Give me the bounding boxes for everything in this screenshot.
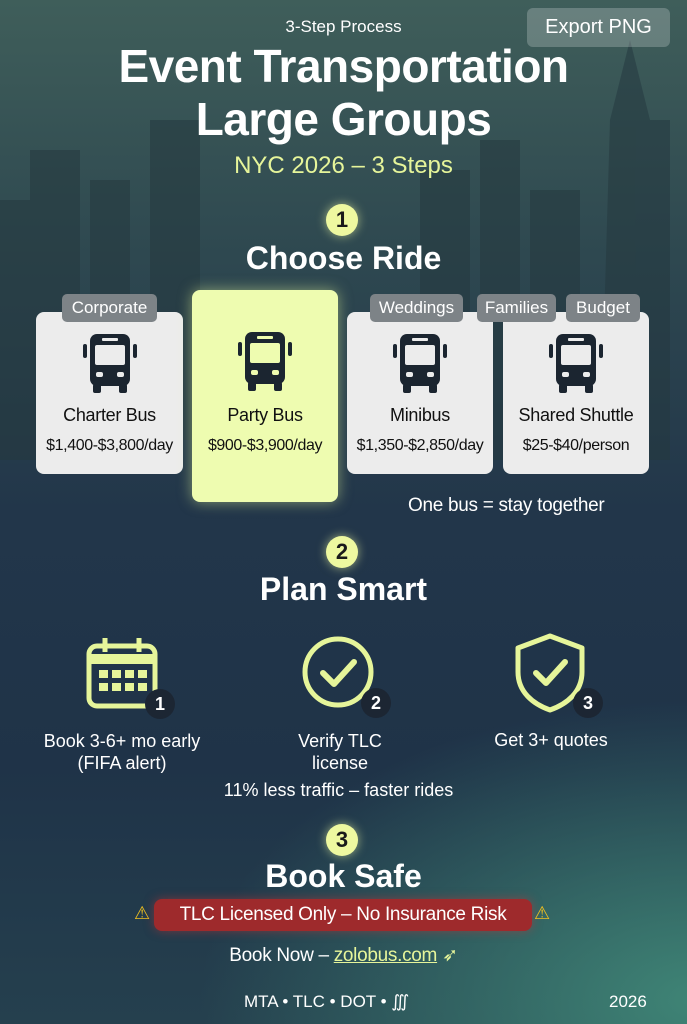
stat: 11% less traffic – faster rides <box>224 780 453 800</box>
title: Event Transportation <box>118 40 569 92</box>
text: book early <box>44 731 200 773</box>
step 3 badge: 3 <box>336 827 348 852</box>
tag: families <box>477 294 556 322</box>
export button <box>527 8 670 47</box>
step 3 badge <box>326 824 358 856</box>
subtitle: 3-Step Process <box>285 17 402 36</box>
heading: plan smart: Plan Smart <box>260 571 427 607</box>
tag: weddings <box>370 294 463 322</box>
warning pill: ⚠ <box>134 903 150 923</box>
card: shared shuttle <box>503 312 649 474</box>
text: verify tlc: license <box>312 753 368 773</box>
text: verify tlc <box>298 731 382 773</box>
title <box>118 40 569 145</box>
step 2 badge: 2 <box>336 539 348 564</box>
tag: corporate: Corporate <box>72 298 147 317</box>
icon: check circle: 2 <box>371 693 381 713</box>
icon: check circle <box>302 636 391 718</box>
note: One bus = stay together <box>408 495 604 516</box>
skyline background <box>0 41 670 380</box>
text: book early: (FIFA alert) <box>77 753 166 773</box>
card: minibus: $1,350-$2,850/day <box>357 437 483 454</box>
card: shared shuttle: Shared Shuttle <box>519 405 633 425</box>
card: shared shuttle: $25-$40/person <box>523 437 629 454</box>
card: party bus: $900-$3,900/day <box>208 437 322 454</box>
tag: budget <box>566 294 640 322</box>
tagline: NYC 2026 – 3 Steps <box>234 152 453 179</box>
card: party bus <box>192 290 338 502</box>
card: charter bus: $1,400-$3,800/day <box>46 437 173 454</box>
call to action: Book Now – zolobus.com ➶ <box>229 945 458 966</box>
text: quotes: Get 3+ quotes <box>494 730 608 750</box>
step 1 badge: 1 <box>336 207 348 232</box>
heading: book safe: Book Safe <box>265 858 422 894</box>
card: minibus: Minibus <box>390 405 450 425</box>
card: charter bus <box>36 312 183 474</box>
tag: weddings: Weddings <box>379 298 454 317</box>
card: party bus: Party Bus <box>227 405 303 425</box>
footer agencies: MTA • TLC • DOT • ∭ <box>244 992 409 1011</box>
icon: shield <box>516 634 603 718</box>
tag: corporate <box>62 294 157 322</box>
warning pill: ⚠ <box>534 903 550 923</box>
export button: Export PNG <box>545 16 652 38</box>
card: charter bus: Charter Bus <box>63 405 156 425</box>
card: minibus <box>347 312 493 474</box>
footer year: 2026 <box>609 992 647 1011</box>
icon: shield: 3 <box>583 693 593 713</box>
text: book early: Book 3-6+ mo early <box>44 731 200 751</box>
tag: budget: Budget <box>576 298 630 317</box>
warning pill: TLC Licensed Only – No Insurance Risk <box>180 904 506 925</box>
warning pill <box>134 893 550 937</box>
text: verify tlc: Verify TLC <box>298 731 382 751</box>
title: Large Groups <box>196 93 491 145</box>
icon: calendar: 1 <box>155 694 165 714</box>
step 1 badge <box>326 204 358 236</box>
step 2 badge <box>326 536 358 568</box>
tag: families: Families <box>485 298 548 317</box>
heading: choose ride: Choose Ride <box>246 240 441 276</box>
icon: calendar <box>86 638 175 719</box>
